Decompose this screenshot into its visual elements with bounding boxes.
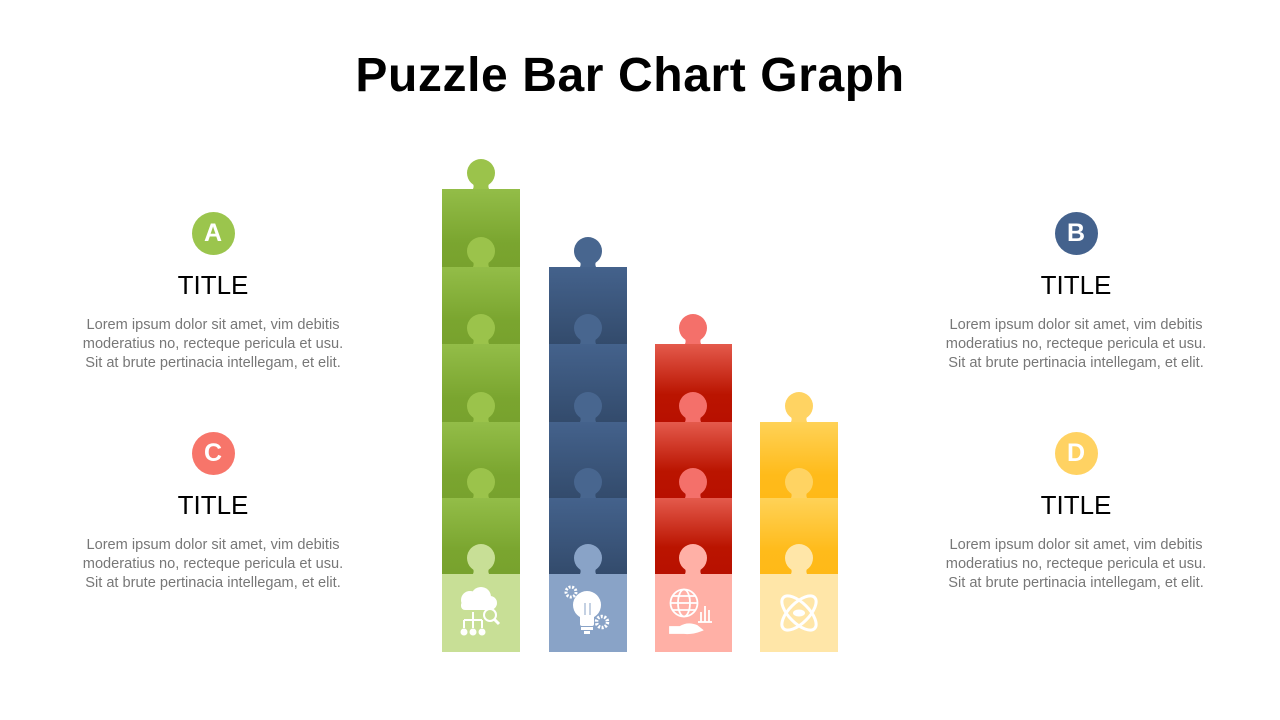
text B bbox=[946, 317, 1206, 371]
text B: Sit at brute pertinacia intellegam, et elit. bbox=[948, 355, 1204, 371]
text D: Lorem ipsum dolor sit amet, vim debitis bbox=[949, 537, 1203, 553]
heading A: TITLE bbox=[178, 270, 248, 300]
panel: D bbox=[946, 432, 1206, 591]
icon: cloud network bbox=[460, 587, 499, 636]
icon: lightbulb gears bbox=[566, 587, 608, 634]
text B: moderatius no, recteque pericula et usu. bbox=[946, 336, 1206, 352]
bar: yellow bbox=[760, 392, 838, 652]
badge B: B bbox=[1067, 219, 1085, 247]
badge A bbox=[192, 212, 234, 255]
text A bbox=[83, 317, 343, 371]
panel: A bbox=[83, 212, 343, 371]
bar: blue bbox=[549, 237, 627, 652]
text C: Lorem ipsum dolor sit amet, vim debitis bbox=[86, 537, 340, 553]
badge C: C bbox=[204, 439, 222, 467]
icon: atom bbox=[776, 590, 822, 636]
heading D: TITLE bbox=[1041, 490, 1111, 520]
badge C bbox=[192, 432, 234, 475]
panel: C bbox=[83, 432, 343, 591]
text C: moderatius no, recteque pericula et usu. bbox=[83, 556, 343, 572]
bar: green bbox=[442, 159, 520, 652]
text C bbox=[83, 537, 343, 591]
heading C: TITLE bbox=[178, 490, 248, 520]
text B: Lorem ipsum dolor sit amet, vim debitis bbox=[949, 317, 1203, 333]
icon: globe hand chart bbox=[670, 590, 712, 633]
text A: Sit at brute pertinacia intellegam, et elit. bbox=[85, 355, 341, 371]
text C: Sit at brute pertinacia intellegam, et elit. bbox=[85, 575, 341, 591]
text D: Sit at brute pertinacia intellegam, et elit. bbox=[948, 575, 1204, 591]
badge D bbox=[1054, 432, 1098, 475]
badge B bbox=[1054, 212, 1098, 255]
text A: moderatius no, recteque pericula et usu. bbox=[83, 336, 343, 352]
title: Puzzle Bar Chart Graph bbox=[355, 49, 905, 102]
text A: Lorem ipsum dolor sit amet, vim debitis bbox=[86, 317, 340, 333]
badge D: D bbox=[1067, 439, 1085, 467]
badge A: A bbox=[204, 219, 222, 247]
text D: moderatius no, recteque pericula et usu. bbox=[946, 556, 1206, 572]
text D bbox=[946, 537, 1206, 591]
bar: red bbox=[655, 314, 732, 652]
panel: B bbox=[946, 212, 1206, 371]
heading B: TITLE bbox=[1041, 270, 1111, 300]
